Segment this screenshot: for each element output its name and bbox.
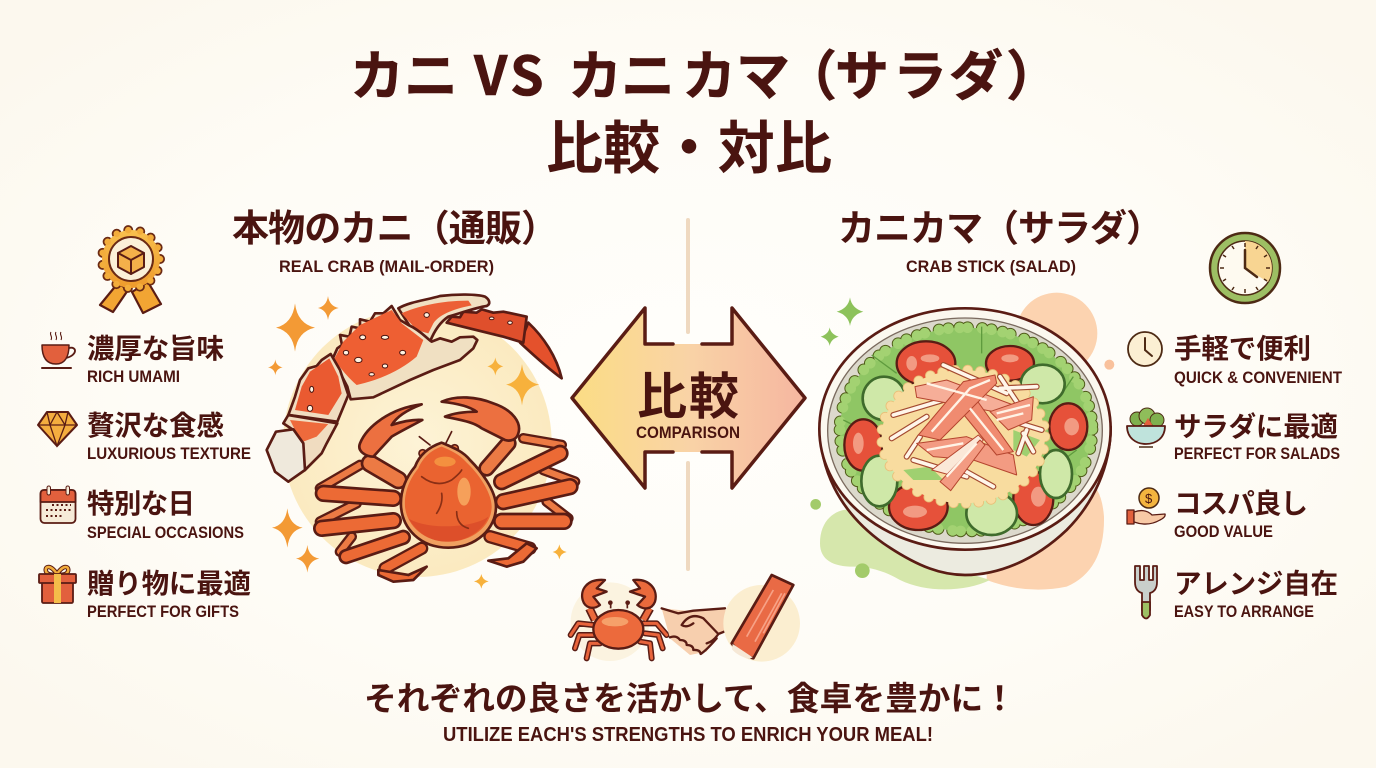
item: special occasions [40,481,244,542]
left heading: REAL CRAB (MAIL-ORDER) [279,257,494,276]
crab sticks [915,375,1033,491]
halo circle [283,308,552,577]
item: easy to arrange: アレンジ自在 [1174,561,1338,601]
title: 比較・対比 [546,103,832,185]
right feature list [1127,326,1343,621]
item: quick and convenient [1128,326,1343,387]
title [350,32,1060,185]
item: perfect for salads [1127,404,1340,463]
comparison double arrow [572,308,805,488]
small crab [571,580,667,661]
item: luxurious texture [38,403,251,463]
shredded crab strands [892,365,1042,487]
item: luxurious texture: 贅沢な食感 [87,403,224,443]
item: easy to arrange [1135,561,1338,621]
icon group: crab, handshake, crab stick [571,575,800,662]
illustration: crab stick salad [810,293,1114,590]
snow crab shell [401,432,496,548]
item: special occasions: SPECIAL OCCASIONS [87,523,244,542]
shell pores [307,313,512,411]
bottom message: それぞれの良さを活かして、食卓を豊かに！ [364,672,1016,720]
left heading: 本物のカニ（通販） [232,198,558,252]
item: easy to arrange: EASY TO ARRANGE [1174,602,1314,621]
comparison double arrow: COMPARISON [636,423,740,442]
bowl [819,308,1111,575]
title: カニVSカニカマ（サラダ） [350,32,1060,111]
illustration: real crab [267,295,575,589]
right heading: カニカマ（サラダ） [838,198,1163,252]
crab stick [723,575,800,662]
item: perfect for salads: サラダに最適 [1174,404,1338,444]
item: perfect for gifts: 贈り物に最適 [87,561,251,601]
item: perfect for salads: PERFECT FOR SALADS [1174,444,1340,463]
bottom message [364,672,1016,746]
handshake [662,608,730,655]
snow crab back legs [320,438,575,552]
center divider line bottom [686,461,690,571]
icon: clock with green rim [1210,233,1280,303]
snow crab pincer arms [359,397,519,480]
item: special occasions: 特別な日 [87,481,195,521]
icon: award badge with parcel [100,230,161,313]
comparison double arrow: 比較 [637,357,739,429]
left heading [232,198,558,276]
item: rich umami: 濃厚な旨味 [87,326,224,366]
lettuce [840,327,1092,531]
right heading [838,198,1163,276]
left feature list [38,326,251,621]
center divider line top [686,218,690,334]
king crab leg with claw [267,295,562,482]
item: perfect for gifts: PERFECT FOR GIFTS [87,602,239,621]
item: good value: GOOD VALUE [1174,522,1273,541]
right heading: CRAB STICK (SALAD) [906,257,1076,276]
item: luxurious texture: LUXURIOUS TEXTURE [87,444,251,463]
snow crab front legs [322,453,570,582]
item: perfect for gifts [39,561,251,621]
item: rich umami: RICH UMAMI [87,367,180,386]
cucumber slices [861,365,1072,535]
dressing [882,370,1045,503]
item: good value: コスパ良し [1174,481,1308,521]
bottom message: UTILIZE EACH'S STRENGTHS TO ENRICH YOUR MEAL! [443,724,933,746]
item: good value: $ [1145,491,1153,506]
item: good value [1127,481,1308,541]
item: rich umami [42,326,224,386]
decorative blobs [810,293,1114,590]
item: quick and convenient: 手軽で便利 [1174,326,1311,366]
tomato slices [844,341,1087,530]
item: quick and convenient: QUICK & CONVENIENT [1174,368,1343,387]
sparkles [268,296,567,589]
